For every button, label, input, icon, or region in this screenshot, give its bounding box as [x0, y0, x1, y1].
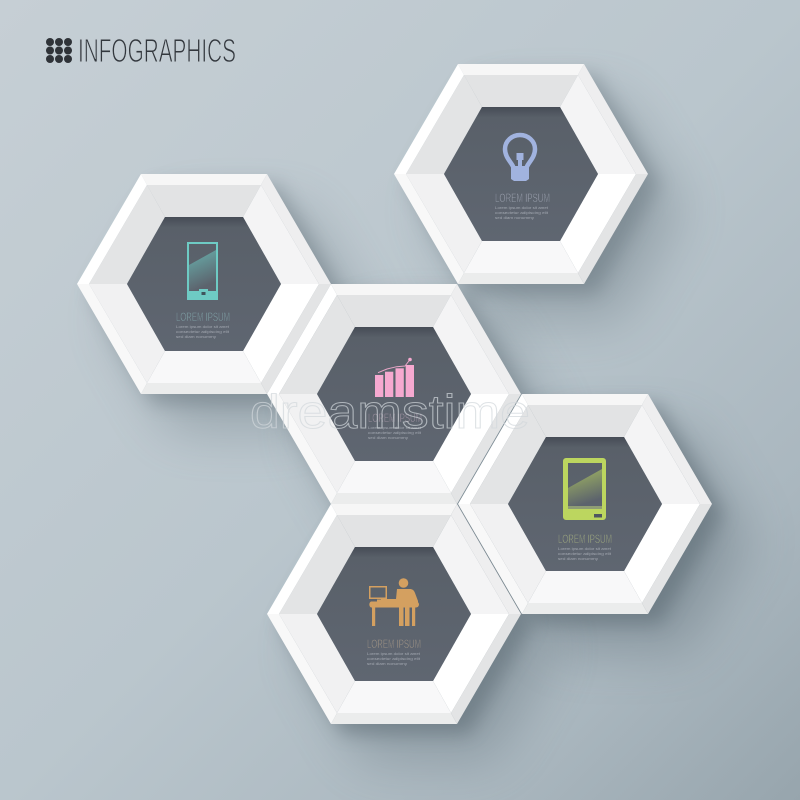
text block: [495, 191, 550, 220]
icon: rising bar chart: [375, 358, 414, 397]
icon: person at desk: [369, 578, 419, 626]
panel: middle hexagon, bar chart: [267, 284, 521, 504]
panel: bottom hexagon, person at desk: [267, 504, 521, 724]
icon: dot grid: [46, 38, 72, 63]
text block: LOREM IPSUM: [367, 637, 421, 651]
text block: sed diam nonummy: [367, 661, 407, 666]
text block: [367, 637, 421, 666]
hexagon drop shadows: [89, 74, 749, 760]
icon: smartphone: [188, 243, 218, 300]
text block: [176, 310, 230, 339]
text block: consectetur adipiscing elit: [368, 430, 422, 435]
text block: consectetur adipiscing elit: [367, 656, 421, 661]
text block: LOREM IPSUM: [495, 191, 550, 205]
text block: Lorem ipsum dolor sit amet: [495, 205, 549, 210]
text block: Lorem ipsum dolor sit amet: [368, 425, 422, 430]
text block: Lorem ipsum dolor sit amet: [367, 651, 421, 656]
text block: [368, 411, 422, 440]
text block: consectetur adipiscing elit: [495, 210, 549, 215]
text block: consectetur adipiscing elit: [176, 329, 230, 334]
text block: [558, 532, 612, 561]
panel: top hexagon, lightbulb: [394, 64, 648, 284]
text block: LOREM IPSUM: [558, 532, 612, 546]
text block: sed diam nonummy: [368, 435, 408, 440]
heading text: INFOGRAPHICS: [78, 32, 236, 69]
text block: sed diam nonummy: [495, 215, 534, 220]
text block: LOREM IPSUM: [176, 310, 230, 324]
panel: right hexagon, tablet: [458, 394, 712, 614]
text block: sed diam nonummy: [558, 556, 598, 561]
text block: Lorem ipsum dolor sit amet: [176, 324, 230, 329]
text block: sed diam nonummy: [176, 334, 216, 339]
text block: Lorem ipsum dolor sit amet: [558, 546, 612, 551]
text block: consectetur adipiscing elit: [558, 551, 612, 556]
icon: tablet: [563, 458, 606, 520]
watermark: dreamstime: [250, 385, 530, 438]
icon: lightbulb: [505, 135, 535, 181]
text block: LOREM IPSUM: [368, 411, 422, 425]
title: infographics: [46, 32, 236, 69]
panel: left hexagon, smartphone: [77, 174, 331, 394]
